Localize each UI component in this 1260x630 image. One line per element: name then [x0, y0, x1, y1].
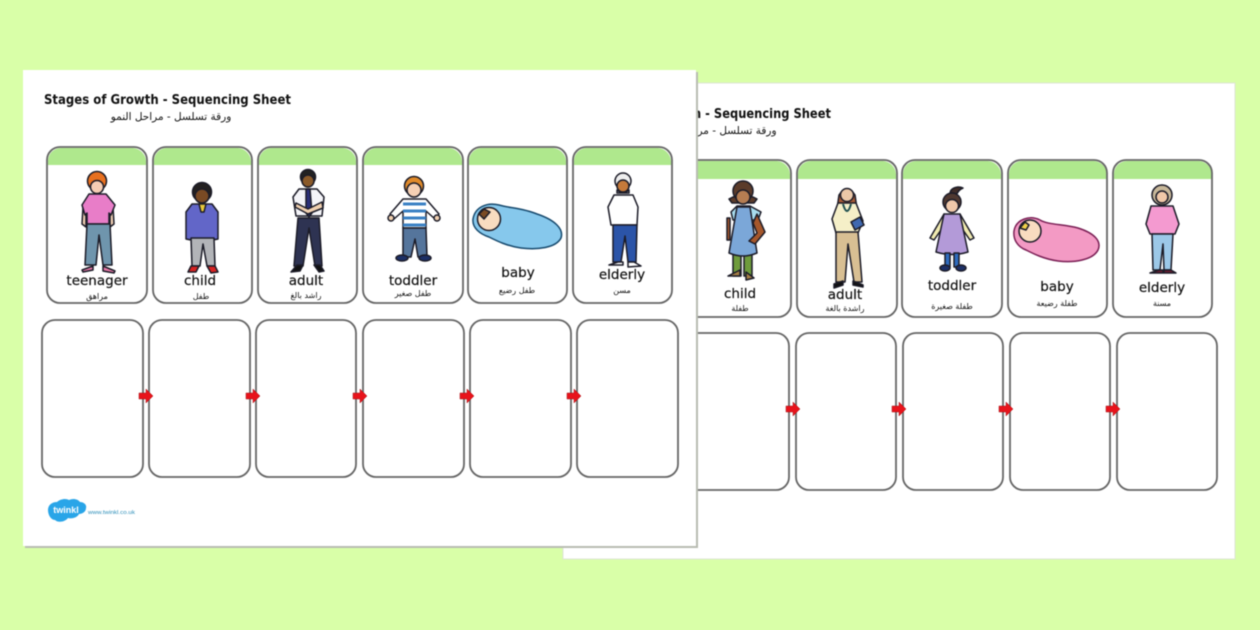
- back sheet labels: طفلة رضيعة: [1036, 299, 1078, 308]
- figure: elderly woman: [1146, 185, 1179, 273]
- front sheet card row: [47, 147, 672, 303]
- front sheet title: Stages of Growth - Sequencing Sheet: [44, 93, 291, 108]
- front sheet labels: طفل رضيع: [499, 286, 535, 295]
- front sheet labels: toddler: [389, 273, 438, 289]
- front sheet labels: baby: [501, 265, 535, 281]
- front sheet labels: adult: [289, 273, 323, 289]
- back sheet red arrows: [786, 402, 1120, 416]
- back sheet labels: [724, 278, 1185, 313]
- figure: girl child: [727, 181, 765, 280]
- front sheet labels: [66, 265, 645, 301]
- figure: child: [186, 182, 218, 273]
- twinkl logo: twinkl: [53, 505, 79, 515]
- figure: pink swaddled baby: [1014, 218, 1099, 262]
- back sheet labels: طفلة صغيرة: [931, 302, 973, 311]
- front sheet empty boxes: [42, 320, 678, 477]
- back sheet labels: elderly: [1139, 280, 1185, 296]
- figure: elderly man: [608, 173, 641, 267]
- panel: back worksheet: [563, 83, 1235, 559]
- front sheet labels: مراهق: [86, 292, 108, 301]
- back sheet labels: طفلة: [731, 304, 749, 313]
- back sheet empty boxes: [680, 333, 1217, 490]
- back sheet labels: toddler: [928, 278, 977, 294]
- front sheet labels: elderly: [599, 267, 645, 283]
- front sheet red arrows: [139, 389, 581, 403]
- panel: front worksheet: [23, 70, 698, 548]
- front sheet labels: مسن: [613, 286, 631, 295]
- front sheet labels: child: [184, 273, 216, 289]
- front sheet labels: teenager: [66, 273, 128, 289]
- back sheet labels: baby: [1040, 279, 1074, 295]
- figure: teenager: [82, 172, 115, 273]
- figure: adult man: [291, 170, 324, 272]
- front sheet arabic subtitle: ورقة تسلسل - مراحل النمو: [110, 111, 231, 123]
- twinkl logo: www.twinkl.co.uk: [87, 510, 135, 516]
- figure: adult woman: [832, 188, 864, 288]
- twinkl logo: [48, 499, 135, 522]
- back sheet title: h - Sequencing Sheet: [693, 107, 831, 122]
- front sheet labels: طفل: [193, 292, 209, 301]
- figure: toddler boy: [388, 176, 440, 261]
- back sheet labels: راشدة بالغة: [826, 304, 865, 313]
- back sheet labels: مسنة: [1153, 299, 1171, 308]
- back sheet arabic subtitle: ورقة تسلسل - مر: [696, 125, 777, 137]
- front sheet labels: طفل صغير: [394, 289, 431, 298]
- front sheet labels: راشد بالغ: [291, 291, 322, 300]
- back sheet card row: [680, 160, 1212, 317]
- back sheet labels: child: [724, 286, 756, 302]
- back sheet labels: adult: [828, 287, 862, 303]
- figure: blue swaddled baby: [473, 204, 562, 249]
- figure: toddler girl: [930, 187, 974, 271]
